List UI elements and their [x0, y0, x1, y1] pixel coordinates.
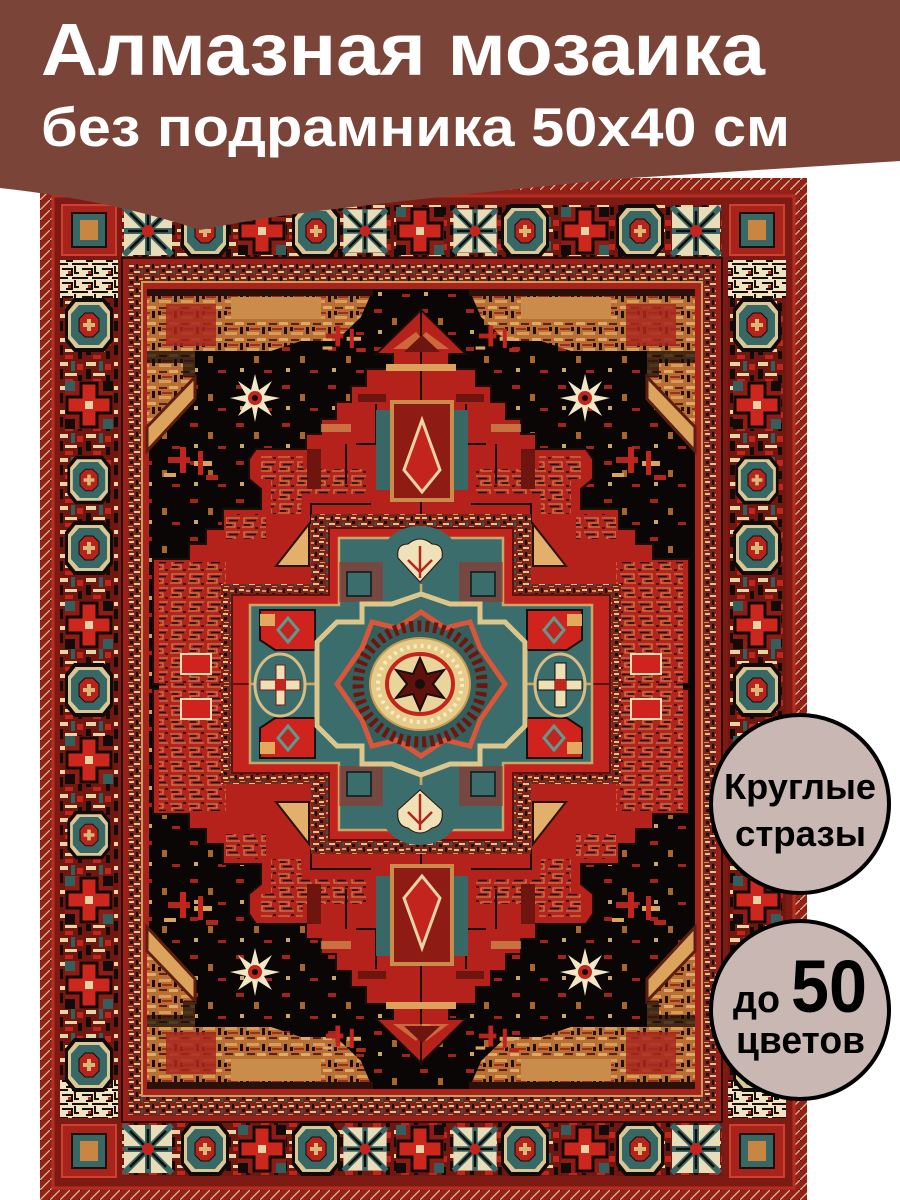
corner squares — [62, 205, 784, 1177]
left cross ornament — [255, 654, 305, 716]
subtitle: без подрамника 50х40 см — [41, 96, 790, 158]
badge: up to 50 colours — [711, 921, 889, 1099]
badge: up to 50 colours: цветов — [736, 1020, 865, 1062]
outer woven edge — [46, 184, 801, 1196]
left border band — [60, 260, 118, 1118]
top border band — [122, 204, 722, 258]
right border band — [728, 260, 786, 1118]
small field motifs — [164, 326, 666, 1052]
bottom border band — [122, 1122, 722, 1176]
inner red line frame — [53, 196, 794, 1188]
badge: up to 50 colours: 50 — [791, 945, 867, 1028]
badge: up to 50 colours: до — [733, 979, 780, 1021]
badge: round rhinestones: стразы — [735, 813, 866, 854]
black field — [149, 289, 695, 1089]
badge: round rhinestones — [711, 715, 889, 893]
carpet artwork — [40, 178, 807, 1200]
red stepped medallion — [153, 310, 689, 1063]
inner guard border — [122, 258, 722, 1122]
central rosette — [317, 594, 525, 775]
white flowers — [230, 374, 610, 996]
header banner — [0, 0, 900, 230]
stepped teal cross — [221, 514, 621, 854]
central vertical panels — [376, 335, 468, 1043]
badge: round rhinestones: Круглые — [724, 766, 876, 807]
right cross ornament — [535, 654, 585, 716]
field corner spandrels — [147, 289, 695, 1089]
top oval ornament — [382, 526, 458, 584]
bottom oval ornament — [382, 785, 458, 845]
carpet outer frame — [40, 178, 807, 1200]
title: Алмазная мозаика — [41, 8, 766, 91]
